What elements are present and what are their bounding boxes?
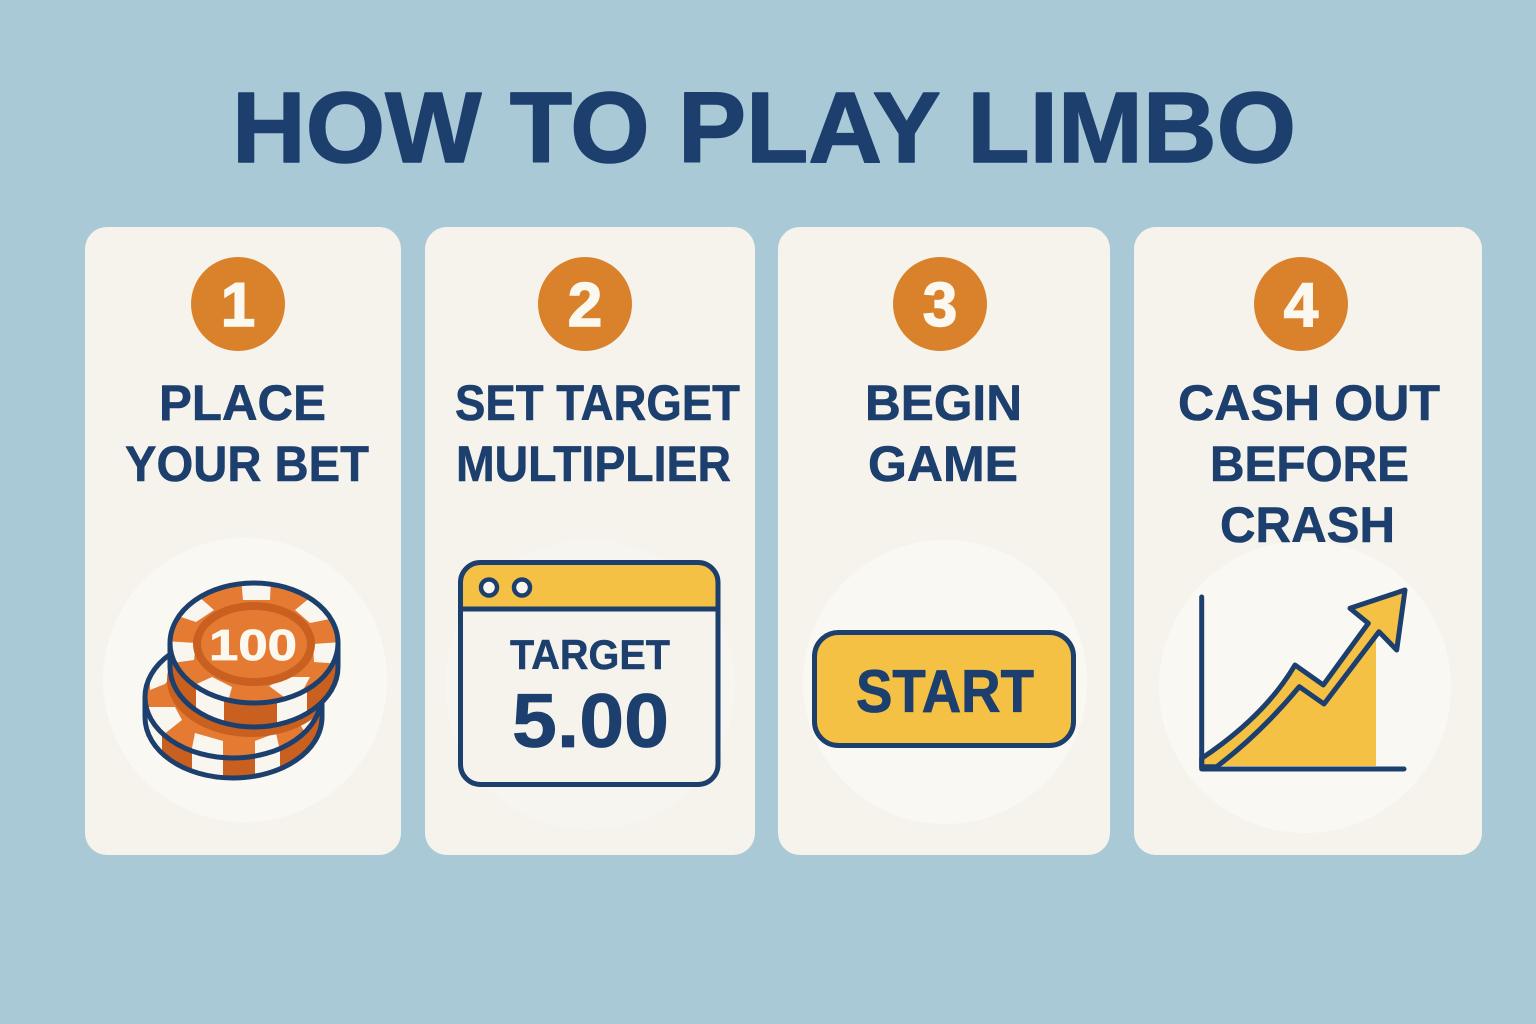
icon: rising chart with arrow (1202, 590, 1405, 769)
step number 2 (538, 257, 632, 351)
icon: start button: START (856, 658, 1034, 725)
lower chip (142, 653, 324, 780)
heading: begin game (865, 375, 1022, 492)
icon: target window (460, 562, 718, 784)
step number 1 (191, 257, 285, 351)
icon backdrop: step 3 (803, 540, 1087, 824)
step number 3 (893, 257, 987, 351)
heading: place your bet (125, 375, 369, 492)
shadow under upper chip (167, 672, 316, 737)
heading: begin game: GAME (868, 436, 1018, 492)
heading: set target multiplier (455, 375, 740, 492)
icon backdrop: step 1 (103, 538, 387, 822)
panel: step 2 set target multiplier (425, 227, 755, 855)
step number 2: 2 (568, 271, 602, 340)
heading: cash out before crash: CRASH (1220, 497, 1395, 553)
heading: place your bet: YOUR BET (125, 436, 369, 492)
heading: cash out before crash (1178, 375, 1440, 553)
title: HOW TO PLAY LIMBO (232, 72, 1296, 184)
icon: start button (814, 632, 1074, 746)
heading: set target multiplier: MULTIPLIER (456, 436, 731, 492)
panel: step 3 begin game (778, 227, 1110, 855)
heading: begin game: BEGIN (865, 375, 1022, 431)
heading: cash out before crash: BEFORE (1210, 436, 1409, 492)
heading: cash out before crash: CASH OUT (1178, 375, 1440, 431)
step number 4: 4 (1284, 271, 1319, 340)
icon backdrop: step 2 (445, 540, 735, 830)
value: 5.00: 5.00 (512, 679, 669, 764)
heading: place your bet: PLACE (159, 375, 326, 431)
panel: step 1 place your bet (85, 227, 401, 855)
icon backdrop: step 4 (1159, 541, 1451, 833)
upper chip (165, 578, 342, 730)
step number 1: 1 (221, 271, 255, 340)
step number 3: 3 (923, 271, 957, 340)
chip value: 100 (209, 621, 297, 670)
heading: set target multiplier: SET TARGET (455, 375, 740, 431)
panel: step 4 cash out before crash (1134, 227, 1482, 855)
step number 4 (1254, 257, 1348, 351)
label: target: TARGET (510, 631, 670, 678)
icon: poker chips stack (140, 578, 342, 780)
